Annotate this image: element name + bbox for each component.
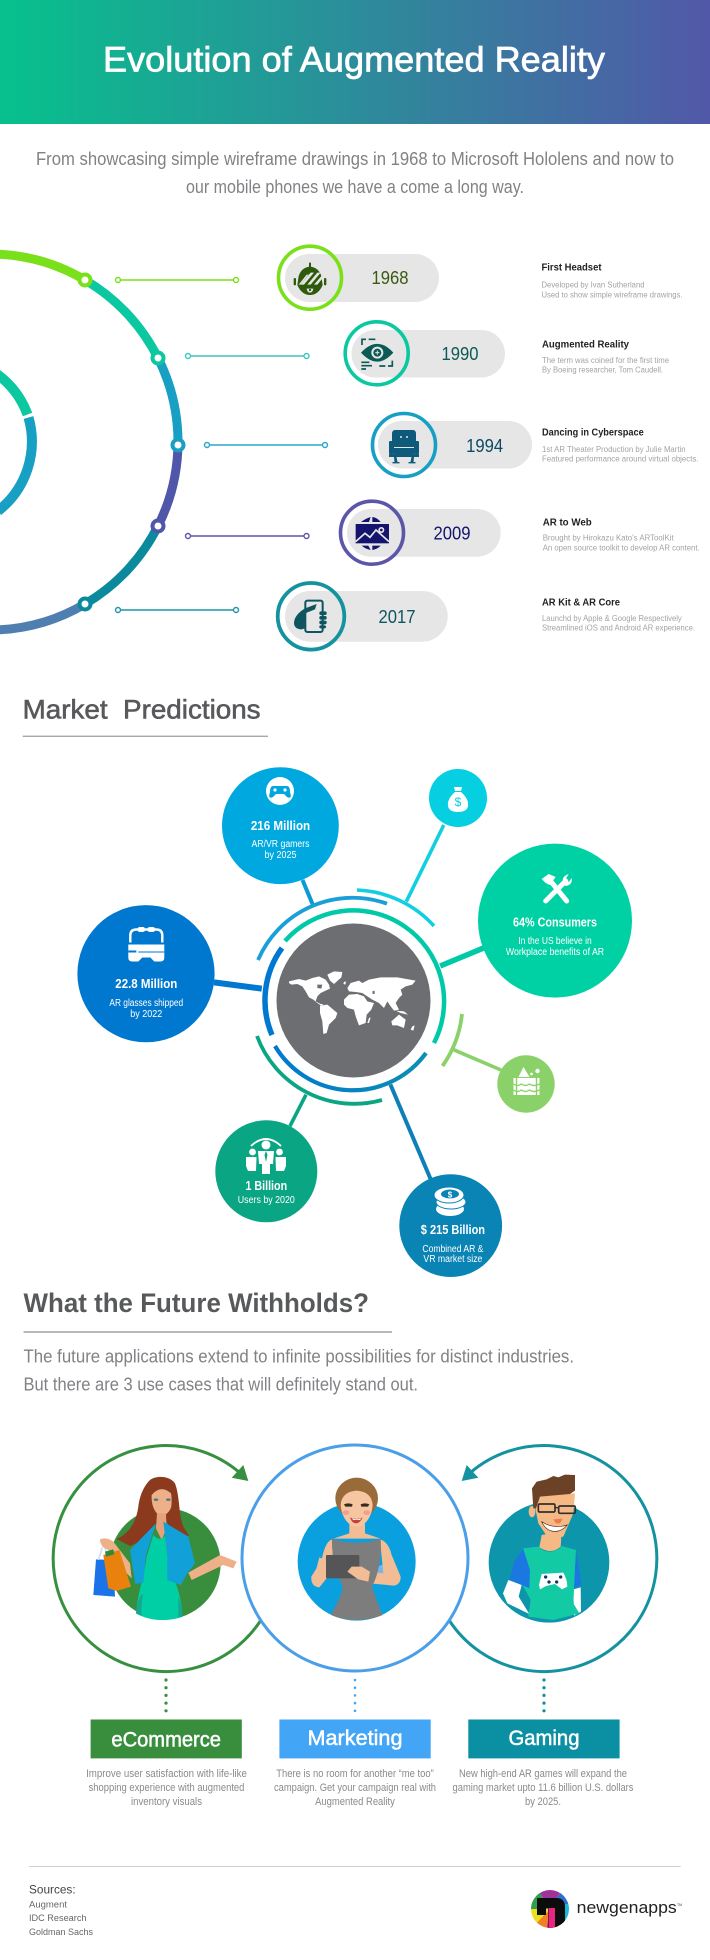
future intro text: The future applications extend to infinite possibilities for distinct industries. <box>24 1347 574 1367</box>
pill: 2017: 2017 <box>378 606 416 627</box>
bubble: $215 Billion: Combined AR & <box>422 1244 484 1255</box>
logo wordmark: newgenapps <box>577 1899 677 1917</box>
text: Marketing <box>274 1768 436 1808</box>
logo mark <box>531 1890 569 1928</box>
bubble: $215 Billion <box>399 1174 502 1277</box>
pill: 1990 <box>345 322 505 385</box>
icon: phone in hand <box>294 601 327 632</box>
text: Gaming: by 2025. <box>525 1796 561 1808</box>
ring arcs <box>257 890 462 1104</box>
label: eCommerce: eCommerce <box>111 1727 221 1751</box>
logo: newgenapps <box>531 1890 682 1928</box>
bubble: 22.8 Million <box>77 905 215 1042</box>
figure: businesswoman <box>298 1478 416 1621</box>
heading: What the Future Withholds: What the Future Withholds? <box>24 1288 369 1318</box>
pill: 2017 <box>278 583 448 650</box>
connector lines <box>214 825 501 1180</box>
milestone: Dancing in Cyberspace <box>542 427 698 464</box>
sources <box>29 1882 93 1938</box>
milestone: AR to Web: Brought by Hirokazu Kato's ARToolKit <box>543 533 674 543</box>
logo: newgenapps: TM <box>677 1903 682 1907</box>
sources: Augment <box>29 1900 67 1910</box>
use case circles <box>53 1445 657 1672</box>
text: Gaming: gaming market upto 11.6 billion U.S. dollars <box>452 1782 634 1794</box>
milestone: First Headset: Developed by Ivan Sutherland <box>542 280 645 290</box>
timeline arcs <box>0 254 184 630</box>
pill: 1994: 1994 <box>466 435 503 456</box>
bubble: $215 Billion: $ 215 Billion <box>421 1222 485 1237</box>
bubble: 216 Million <box>222 767 339 884</box>
intro text: our mobile phones we have a come a long way. <box>186 176 524 197</box>
bubble: 22.8 Million: 22.8 Million <box>115 976 177 991</box>
text: Marketing: There is no room for another “me too” <box>276 1768 434 1780</box>
bubble: $215 Billion: VR market size <box>423 1254 483 1265</box>
text: Gaming <box>452 1768 634 1808</box>
label: eCommerce <box>91 1720 242 1758</box>
arc: eCommerce <box>53 1446 261 1672</box>
milestone: AR to Web <box>543 516 700 552</box>
milestone: Augmented Reality: The term was coined for the first time <box>542 355 669 365</box>
sources: Goldman Sachs <box>29 1927 93 1938</box>
milestone: Augmented Reality <box>542 339 669 375</box>
icon: people <box>246 1139 286 1174</box>
bubble: 64% Consumers <box>478 844 632 998</box>
label: Marketing: Marketing <box>308 1726 402 1750</box>
milestone: AR Kit & AR Core: AR Kit & AR Core <box>542 597 620 609</box>
sources: Sources: <box>29 1882 76 1896</box>
icon: AR glasses <box>128 927 164 962</box>
heading: Market Predictions: Market Predictions <box>23 694 261 724</box>
icon: tools <box>542 874 572 901</box>
future intro text <box>24 1347 574 1394</box>
title: Evolution of Augmented Reality <box>103 40 606 80</box>
bubble: 1 Billion: Users by 2020 <box>238 1195 295 1206</box>
pill: 1990: 1990 <box>442 343 478 364</box>
icon: headset <box>294 263 326 295</box>
pill: 1994 <box>372 414 532 476</box>
icon: buildings <box>514 1067 540 1095</box>
pill: 1968 <box>278 246 439 309</box>
sources: IDC Research <box>29 1913 86 1924</box>
milestone: AR to Web: AR to Web <box>543 516 592 528</box>
text: eCommerce <box>86 1768 247 1808</box>
milestone: AR Kit & AR Core <box>542 597 695 633</box>
bubble: 22.8 Million: AR glasses shipped <box>109 998 183 1009</box>
icon: globe picture <box>356 517 389 550</box>
footer rule <box>29 1866 681 1867</box>
bubble: 22.8 Million: by 2022 <box>130 1009 163 1020</box>
figure: gamer <box>489 1475 609 1623</box>
milestone: Dancing in Cyberspace: Dancing in Cyberspace <box>542 427 644 439</box>
icon: money bag: $ <box>455 795 462 809</box>
bubble: 216 Million: by 2025 <box>264 850 297 861</box>
pill: 2009: 2009 <box>434 522 470 544</box>
icon: coins: $ <box>448 1190 453 1200</box>
milestone: First Headset: First Headset <box>542 262 602 274</box>
bubble: 64% Consumers: Workplace benefits of AR <box>506 947 604 958</box>
text: eCommerce: shopping experience with augmented <box>89 1782 244 1794</box>
intro text <box>36 148 674 197</box>
outer arc <box>0 254 178 630</box>
text: eCommerce: inventory visuals <box>131 1796 202 1808</box>
bubble: 1 Billion: 1 Billion <box>245 1178 287 1193</box>
milestone: First Headset: Used to show simple wireframe drawings. <box>542 289 682 299</box>
icon: chair <box>389 430 419 463</box>
connector lines <box>116 278 328 612</box>
icon: gamepad <box>266 777 294 805</box>
label: Gaming <box>468 1720 620 1758</box>
globe circle <box>276 924 430 1078</box>
dotted connectors <box>164 1678 546 1712</box>
timeline dots <box>80 274 184 610</box>
label: Gaming: Gaming <box>508 1726 580 1750</box>
icon: world map <box>289 971 416 1034</box>
text: Marketing: campaign. Get your campaign real with <box>274 1782 436 1794</box>
inner arc <box>0 372 32 511</box>
milestone: Dancing in Cyberspace: 1st AR Theater Production by Julie Martin <box>542 444 686 454</box>
figure: shopper <box>93 1477 237 1620</box>
ring: Marketing <box>242 1445 468 1671</box>
header banner <box>0 0 710 124</box>
bubble: 216 Million: AR/VR gamers <box>252 839 310 850</box>
bubble: 64% Consumers: In the US believe in <box>518 936 592 947</box>
label: Marketing <box>279 1720 431 1758</box>
pill: 2009 <box>340 501 501 564</box>
icon: eye <box>361 339 393 369</box>
arc: Gaming <box>449 1446 657 1672</box>
bubble: money bag <box>429 769 487 827</box>
milestone: Augmented Reality: By Boeing researcher, Tom Caudell. <box>542 365 663 375</box>
bubble: green icon <box>497 1055 555 1113</box>
bubble: 216 Million: 216 Million <box>251 819 310 833</box>
text: Marketing: Augmented Reality <box>315 1796 395 1808</box>
milestone: AR Kit & AR Core: Launchd by Apple & Google Respectively <box>542 613 682 623</box>
bubble: 64% Consumers: 64% Consumers <box>513 914 597 930</box>
future intro text: But there are 3 use cases that will definitely stand out. <box>24 1374 418 1394</box>
milestone: Augmented Reality: Augmented Reality <box>542 339 629 351</box>
text: eCommerce: Improve user satisfaction with life-like <box>86 1768 247 1780</box>
pill: 1968: 1968 <box>372 267 408 288</box>
milestone: AR Kit & AR Core: Streamlined iOS and Android AR experience. <box>542 623 695 633</box>
market predictions diagram <box>77 767 632 1277</box>
text: Gaming: New high-end AR games will expand the <box>459 1768 627 1780</box>
bubble: 1 Billion <box>215 1120 317 1222</box>
milestone: Dancing in Cyberspace: Featured performance around virtual objects. <box>542 454 698 464</box>
milestone: First Headset <box>542 262 682 299</box>
